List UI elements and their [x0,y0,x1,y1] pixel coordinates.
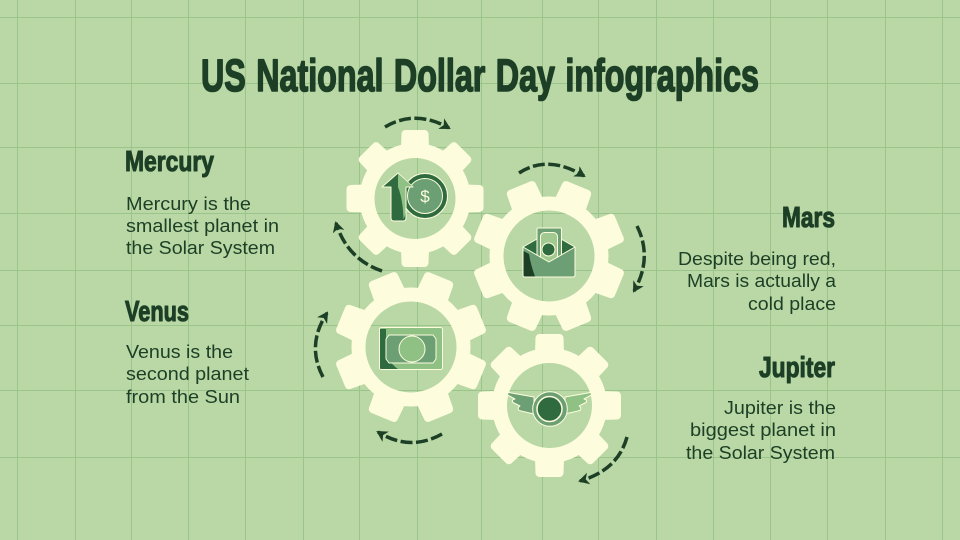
arrow: top of Mercury gear [385,118,449,128]
description: Venus: Venus is the [126,342,233,362]
description: Mercury: the Solar System [126,238,275,258]
arrow: lower left of Mercury gear [336,223,382,271]
description: Mars [678,249,837,314]
arrow: right of Mars gear [634,226,644,291]
text block: Jupiter [686,352,836,463]
description: Mars: Mars is actually a [687,271,837,291]
heading: Mars: Mars [782,202,835,234]
description: Mars: cold place [748,294,836,314]
arrow: lower right of Jupiter gear [580,437,627,481]
arrow: bottom of Venus gear [378,432,442,443]
gear: Mars [478,185,620,327]
description: Mercury [126,194,279,258]
description: Venus: from the Sun [126,387,240,407]
description: Mercury: smallest planet in [126,216,279,236]
title: US National Dollar Day infographics [201,50,759,101]
text block: Venus [125,296,249,407]
icon: envelope with banknote [523,228,575,277]
description: Jupiter: Jupiter is the [724,398,836,418]
icon: coin with up arrow: $ [420,187,430,206]
description: Mars: Despite being red, [678,249,836,269]
gear: Jupiter [482,338,617,473]
description: Jupiter [686,398,836,463]
arrow: top of Mars gear [519,164,584,176]
icon: winged coin [508,392,592,426]
heading: Jupiter: Jupiter [759,352,835,384]
gear: Venus [340,276,482,418]
description: Mercury: Mercury is the [126,194,251,214]
icon: coin with up arrow [382,173,448,221]
heading: Mercury: Mercury [125,146,214,178]
heading: Venus: Venus [125,296,189,328]
icon: banknote [380,328,442,370]
arrow: left of Venus gear [315,313,327,377]
description: Venus [126,342,249,407]
description: Jupiter: the Solar System [686,443,835,463]
gear: Mercury [350,134,480,263]
description: Venus: second planet [126,364,249,384]
text block: Mercury [125,146,279,258]
text block: Mars [678,202,837,314]
description: Jupiter: biggest planet in [690,420,836,440]
